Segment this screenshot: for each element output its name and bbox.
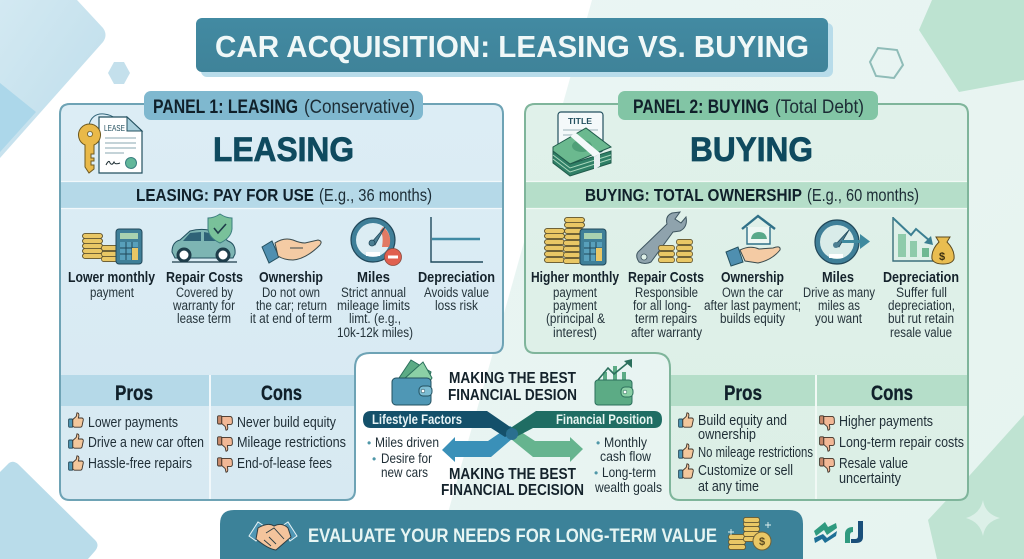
column: ownership: builds equity	[720, 311, 785, 326]
icon: coins: $	[759, 536, 765, 548]
list: lifestyle factors: new cars	[381, 464, 428, 480]
column: ownership: after last payment;	[704, 298, 801, 313]
title banner	[196, 18, 833, 77]
panel 1 badge: PANEL 1: LEASING	[153, 96, 298, 118]
column: repair costs	[628, 212, 704, 340]
list: lifestyle factors: Miles driven	[375, 434, 439, 450]
list: financial position	[594, 434, 662, 495]
column: repair costs: after warranty	[631, 325, 702, 340]
cons: buying: Higher payments	[839, 413, 933, 430]
pros: leasing: Lower payments	[88, 414, 178, 431]
pros: buying: Customize or sell	[698, 462, 793, 479]
pros: leasing: Pros	[115, 382, 153, 405]
cons: buying	[815, 375, 967, 499]
column: depreciation: Suffer full	[896, 285, 947, 300]
column: ownership: the car; return	[256, 298, 327, 313]
band: lifestyle factors: Lifestyle Factors	[372, 412, 462, 427]
icon: house, car and hand	[726, 216, 780, 266]
cons: buying: uncertainty	[839, 470, 901, 487]
column: ownership: Ownership	[259, 269, 323, 286]
column: higher monthly	[531, 217, 620, 340]
heading: making the best financial decision: MAKING THE BEST	[449, 466, 576, 483]
footer banner	[220, 510, 803, 559]
column: lower monthly: Lower monthly	[68, 269, 156, 286]
column: miles: mileage limits	[337, 298, 410, 313]
logo	[814, 521, 863, 543]
heading: making the best financial desion	[448, 370, 577, 404]
cons: leasing: Never build equity	[237, 414, 336, 431]
column: repair costs: Responsible	[635, 285, 698, 300]
cons: leasing: Mileage restrictions	[237, 434, 346, 451]
column: repair costs	[166, 214, 243, 326]
column: miles	[337, 218, 413, 340]
band: total ownership: BUYING: TOTAL OWNERSHIP	[585, 185, 802, 205]
pros: leasing	[61, 375, 209, 472]
pros: leasing: Hassle-free repairs	[88, 455, 192, 472]
column: repair costs: lease term	[177, 311, 231, 326]
column: depreciation: Depreciation	[883, 269, 959, 286]
column: repair costs: term repairs	[635, 311, 697, 326]
column: repair costs: warranty for	[172, 298, 235, 313]
column: higher monthly: payment	[553, 298, 597, 313]
list: lifestyle factors: Desire for	[381, 450, 432, 466]
heading: making the best financial decision: FINANCIAL DECISION	[441, 482, 584, 499]
cons: buying: Resale value	[839, 455, 908, 472]
pros: buying: No mileage restrictions	[698, 444, 813, 461]
list: lifestyle factors	[367, 434, 439, 480]
cons: buying: Long-term repair costs	[839, 434, 964, 451]
icon: speedometer with minus	[351, 218, 402, 266]
pros: buying: at any time	[698, 478, 759, 495]
panel: leasing	[60, 91, 503, 500]
column: repair costs: for all long-	[633, 298, 691, 313]
heading: leasing: LEASING	[213, 131, 354, 169]
list: financial position: •	[594, 466, 598, 480]
column: miles: you want	[815, 311, 862, 326]
band: financial position	[506, 411, 662, 437]
list: financial position: •	[596, 436, 600, 450]
panel: buying	[525, 91, 968, 500]
band: pay for use	[61, 182, 502, 208]
column: repair costs: Repair Costs	[166, 269, 243, 286]
column: miles	[803, 220, 875, 326]
column: depreciation	[418, 217, 495, 313]
icon: blue wallet	[392, 360, 432, 405]
cons: leasing	[209, 375, 354, 499]
column: depreciation: Avoids value	[424, 285, 489, 300]
icon: key and lease document: LEASE	[104, 124, 125, 133]
icon: center node	[506, 428, 518, 440]
column: repair costs: Covered by	[176, 285, 233, 300]
column: depreciation: loss risk	[435, 298, 478, 313]
heading: making the best financial desion: FINANCIAL DESION	[448, 387, 577, 404]
icon: coins and calculator	[82, 229, 142, 264]
pros: buying	[671, 375, 815, 495]
icon: coin stacks and calculator	[544, 217, 606, 265]
icon: flat depreciation chart	[431, 217, 483, 262]
column: depreciation: Depreciation	[418, 269, 495, 286]
icon: key and lease document	[78, 114, 142, 173]
panel 1 badge: (Conservative)	[304, 96, 415, 118]
column: depreciation: but rut retain	[888, 311, 954, 326]
pros: buying: Build equity and	[698, 412, 787, 429]
column: ownership: Ownership	[721, 269, 784, 286]
list: financial position: cash flow	[600, 448, 652, 464]
pros: leasing: Drive a new car often	[88, 434, 204, 451]
column: miles: 10k-12k miles)	[337, 325, 413, 340]
column: miles: Drive as many	[803, 285, 875, 300]
heading: making the best financial desion: MAKING THE BEST	[449, 370, 576, 387]
column: ownership: Do not own	[262, 285, 320, 300]
icon: title and cash stack: TITLE	[568, 117, 593, 126]
list: financial position: Monthly	[604, 434, 647, 450]
icon: car with shield	[172, 214, 237, 262]
panel: financial decision	[363, 359, 662, 499]
icon: speedometer with arrow	[815, 220, 870, 264]
pros: buying: Pros	[724, 382, 762, 405]
band: total ownership	[526, 182, 967, 208]
column: lower monthly	[68, 229, 156, 300]
icon: falling chart and money bag: $	[939, 251, 945, 263]
column: miles: limt. (e.g.,	[349, 311, 401, 326]
icon: title and cash stack	[553, 112, 611, 176]
band: financial position: Financial Position	[556, 412, 653, 427]
column: miles: Strict annual	[341, 285, 406, 300]
column: lower monthly: payment	[90, 285, 134, 300]
panel 2 badge: (Total Debt)	[775, 96, 864, 118]
column: depreciation	[883, 217, 959, 340]
column: ownership: Own the car	[722, 285, 783, 300]
icon: handshake	[249, 522, 297, 550]
heading: buying: BUYING	[690, 131, 813, 169]
column: miles: Miles	[822, 269, 854, 286]
pros: buying: ownership	[698, 426, 756, 443]
arrow: green right arrow	[506, 428, 583, 462]
column: ownership	[250, 239, 332, 326]
cons: leasing: Cons	[261, 382, 302, 405]
column: ownership: it at end of term	[250, 311, 332, 326]
cons: leasing: End-of-lease fees	[237, 455, 332, 472]
column: miles: Miles	[357, 269, 390, 286]
column: miles: miles as	[818, 298, 860, 313]
band: pay for use: (E.g., 36 months)	[319, 185, 432, 205]
column: higher monthly: (principal &	[546, 311, 605, 326]
icon: open hand	[262, 239, 321, 263]
panel 1 badge	[144, 91, 423, 120]
arrow: blue left arrow	[442, 426, 520, 462]
column: higher monthly: payment	[553, 285, 597, 300]
list: lifestyle factors: •	[372, 452, 376, 466]
column: depreciation: resale value	[890, 325, 952, 340]
icon: wrench and coins	[637, 212, 693, 264]
band: total ownership: (E.g., 60 months)	[807, 185, 919, 205]
band: pay for use: LEASING: PAY FOR USE	[136, 185, 314, 205]
icon: green wallet with growth arrow	[595, 359, 633, 405]
heading: making the best financial decision	[441, 466, 584, 499]
column: higher monthly: interest)	[553, 325, 597, 340]
band: lifestyle factors	[363, 411, 516, 437]
list: financial position: wealth goals	[594, 479, 662, 495]
column: repair costs: Repair Costs	[628, 269, 704, 286]
column: ownership	[704, 216, 801, 326]
title banner: CAR ACQUISITION: LEASING VS. BUYING	[215, 29, 809, 64]
panel 2 badge: PANEL 2: BUYING	[633, 96, 769, 118]
column: depreciation: depreciation,	[888, 298, 955, 313]
footer message: EVALUATE YOUR NEEDS FOR LONG-TERM VALUE	[308, 525, 717, 547]
icon: coins	[728, 517, 771, 550]
panel 2 badge	[618, 91, 878, 120]
column: higher monthly: Higher monthly	[531, 269, 620, 286]
list: lifestyle factors: •	[367, 436, 371, 450]
cons: buying: Cons	[871, 382, 913, 405]
list: financial position: Long-term	[602, 464, 656, 480]
